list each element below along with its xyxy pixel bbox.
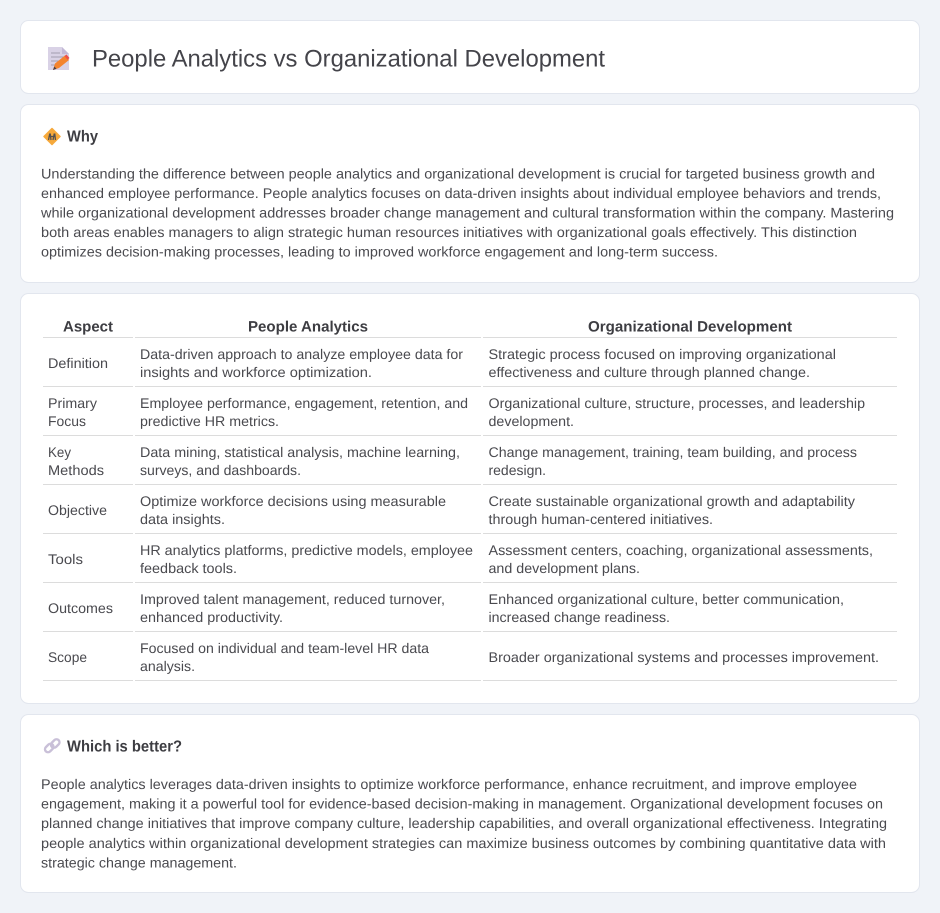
- panel: title header: [20, 20, 920, 94]
- row: definition: Strategic process focused on improving organizational: [488, 346, 836, 362]
- row: tools: Tools: [48, 551, 83, 567]
- row: definition: effectiveness and culture through planned change.: [488, 364, 810, 380]
- row: outcomes: Improved talent management, reduced turnover,: [140, 591, 445, 607]
- table header row: People Analytics: [248, 319, 368, 336]
- row: scope: [43, 640, 897, 680]
- row: primary focus: Primary: [48, 395, 97, 411]
- row: outcomes: Enhanced organizational culture, better communication,: [488, 591, 844, 607]
- row: tools: HR analytics platforms, predictive models, employee: [140, 542, 473, 558]
- title: People Analytics vs Organizational Development: [92, 46, 605, 72]
- table header row: Aspect: [63, 319, 113, 336]
- text block: why paragraph: while organizational development addresses broader change management and cultural transformation within the company. Mastering: [40, 204, 894, 220]
- row: scope: Broader organizational systems and processes improvement.: [488, 649, 879, 665]
- row: outcomes: enhanced productivity.: [140, 609, 283, 625]
- text block: which is better paragraph: strategic change management.: [41, 854, 237, 870]
- row: scope: Scope: [48, 649, 87, 665]
- row: objective: Objective: [48, 502, 107, 518]
- row: key methods: surveys, and dashboards.: [140, 462, 301, 478]
- row: primary focus: development.: [488, 413, 574, 429]
- row: definition: Data-driven approach to analyze employee data for: [140, 346, 463, 362]
- row: objective: Create sustainable organizational growth and adaptability: [488, 493, 855, 509]
- text block: which is better paragraph: people analytics within organizational development strategies can maximize business outcomes by combining quantitative data with: [41, 835, 886, 851]
- table header row: [43, 319, 897, 338]
- row: key methods: redesign.: [488, 462, 546, 478]
- row: definition: insights and workforce optimization.: [140, 364, 372, 380]
- text block: why paragraph: Understanding the difference between people analytics and organizational development is crucial for targeted business growth and: [41, 165, 875, 181]
- row: tools: and development plans.: [488, 560, 640, 576]
- row: outcomes: increased change readiness.: [488, 609, 670, 625]
- text block: why paragraph: optimizes decision-making processes, leading to improved workforce engagement and long-term success.: [41, 244, 718, 260]
- text block: which is better paragraph: [41, 776, 887, 870]
- row: primary focus: Focus: [48, 413, 86, 429]
- row: scope: Focused on individual and team-level HR data: [140, 640, 429, 656]
- row: primary focus: Organizational culture, structure, processes, and leadership: [488, 395, 865, 411]
- icon: orange diamond warning sign: [44, 128, 60, 144]
- panel: comparison table: [20, 294, 920, 704]
- row: key methods: Methods: [48, 462, 104, 478]
- row: key methods: Data mining, statistical analysis, machine learning,: [140, 444, 460, 460]
- text block: which is better paragraph: People analytics leverages data-driven insights to optimize workforce performance, enhance recruitment, and improve employee: [41, 776, 857, 792]
- table header row: Organizational Development: [588, 319, 792, 336]
- icon: memo with pencil: [48, 47, 70, 70]
- row: objective: [43, 493, 897, 534]
- text block: why paragraph: enhanced employee performance. People analytics focuses on data-driven insights about individual employee behaviors and trends,: [41, 185, 881, 201]
- row: tools: Assessment centers, coaching, organizational assessments,: [488, 542, 873, 558]
- text block: which is better paragraph: engagement, making it a powerful tool for evidence-based decision-making in management. Organizational development focuses on: [41, 796, 883, 812]
- row: tools: feedback tools.: [140, 560, 237, 576]
- row: key methods: Key: [48, 444, 71, 460]
- row: scope: analysis.: [140, 658, 195, 674]
- row: outcomes: Outcomes: [48, 600, 113, 616]
- panel: which is better: [20, 714, 920, 892]
- heading: which is better: Which is better?: [67, 738, 182, 756]
- icon: chain link: [44, 738, 61, 753]
- row: objective: data insights.: [140, 511, 225, 527]
- row: definition: [43, 346, 897, 386]
- row: outcomes: [43, 591, 897, 632]
- text block: which is better paragraph: planned change initiatives that improve company culture, leadership capabilities, and overall organizational effectiveness. Integrating: [41, 815, 887, 831]
- row: objective: through human-centered initiatives.: [488, 511, 713, 527]
- row: objective: Optimize workforce decisions using measurable: [140, 493, 446, 509]
- text block: why paragraph: both areas enables managers to align strategic human resources initiatives with organizational goals effectively. This distinction: [41, 224, 857, 240]
- text block: why paragraph: [40, 165, 894, 260]
- row: primary focus: predictive HR metrics.: [140, 413, 279, 429]
- row: key methods: [43, 444, 897, 484]
- row: primary focus: Employee performance, engagement, retention, and: [140, 395, 468, 411]
- row: primary focus: [43, 395, 897, 436]
- row: key methods: Change management, training, team building, and process: [488, 444, 857, 460]
- row: tools: [43, 542, 897, 582]
- row: definition: Definition: [48, 355, 108, 371]
- heading: why: Why: [67, 128, 98, 146]
- panel: why: [20, 104, 920, 282]
